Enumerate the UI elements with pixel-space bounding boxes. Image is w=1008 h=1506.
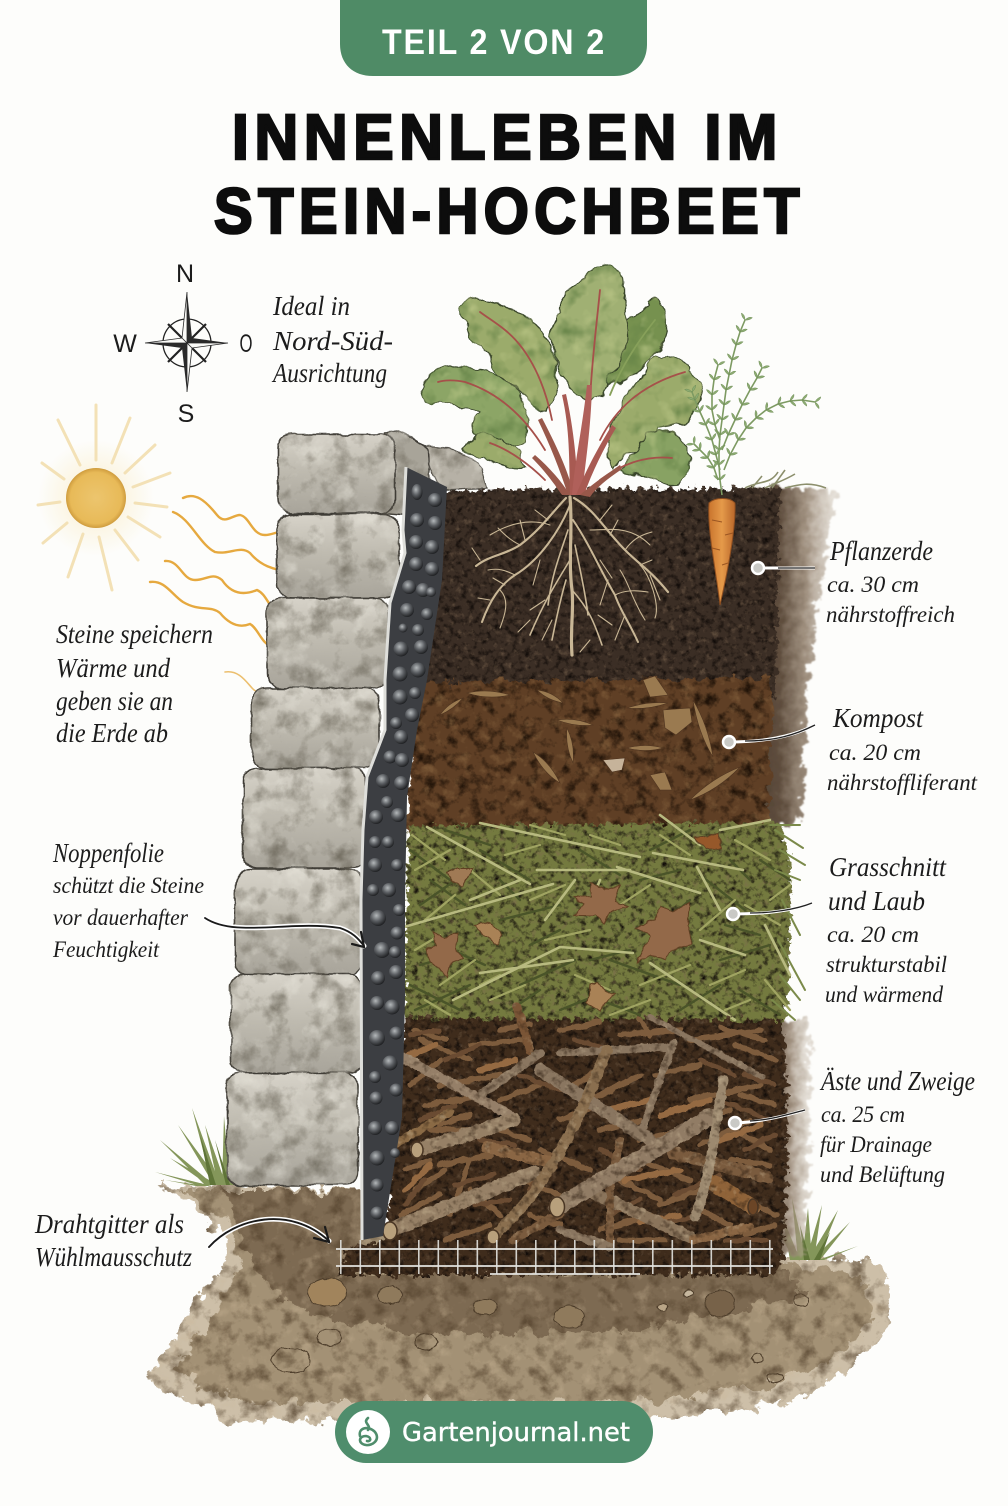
heat waves	[150, 496, 317, 696]
footer pill: brand: Gartenjournal.net	[402, 1418, 630, 1448]
layer: Grasschnitt und Laub	[404, 815, 805, 1028]
thick stems	[532, 385, 622, 497]
layer: Kompost	[405, 676, 772, 835]
title	[214, 101, 805, 247]
plant: roots	[472, 497, 668, 655]
dry leaves on grass	[426, 833, 722, 1011]
branch cut ends	[383, 1142, 758, 1244]
layer: soil wash on right edge	[750, 486, 835, 826]
text: wire mesh note: Wühlmausschutz	[35, 1242, 192, 1272]
plant: carrot	[692, 320, 815, 605]
callout: Grasschnitt: und wärmend	[825, 982, 943, 1007]
dimpled membrane (Noppenfolie)	[361, 467, 447, 1240]
compass: O	[240, 330, 252, 358]
callout: Grasschnitt: und Laub	[828, 886, 925, 916]
callout: Aeste	[729, 1066, 975, 1187]
title: STEIN-HOCHBEET	[214, 175, 805, 247]
large branches	[390, 1007, 767, 1247]
text: stone heat note: Steine speichern	[56, 619, 213, 649]
callout: Aeste: und Belüftung	[820, 1162, 945, 1187]
arrow: to membrane	[205, 918, 364, 947]
callout: Aeste: für Drainage	[820, 1132, 932, 1157]
text: membrane note: vor dauerhafter	[53, 905, 189, 930]
callout: Pflanzerde: ca. 30 cm	[827, 572, 919, 597]
dark grass strands	[410, 830, 790, 1015]
arrow: to wire mesh	[209, 1219, 329, 1247]
callout: Aeste: ca. 25 cm	[821, 1102, 905, 1127]
grass on soil edge	[745, 470, 826, 488]
text: orientation note	[271, 291, 393, 388]
carrot foliage	[692, 320, 815, 495]
callout: Grasschnitt: Grasschnitt	[829, 852, 947, 882]
callouts: layer labels	[723, 536, 978, 1187]
text: wire mesh note: Drahtgitter als	[34, 1209, 184, 1239]
pebbles	[272, 1278, 808, 1383]
branch wash on right edge	[750, 1018, 810, 1255]
text: stone heat note: geben sie an	[56, 686, 173, 716]
callout: Grasschnitt: ca. 20 cm	[827, 922, 919, 947]
grass tufts	[155, 1108, 858, 1260]
callout: Kompost: Kompost	[832, 703, 924, 733]
text: stone heat note	[56, 619, 213, 748]
darker twig fill	[405, 1030, 775, 1240]
text: stone heat note: die Erde ab	[56, 718, 168, 748]
text: membrane note	[52, 838, 204, 962]
text: membrane note: schützt die Steine	[53, 873, 204, 898]
title: INNENLEBEN IM	[232, 101, 783, 173]
wire mesh	[336, 1240, 773, 1274]
callout: Pflanzerde	[752, 536, 955, 627]
callout: Grasschnitt: strukturstabil	[826, 952, 947, 977]
grass blades at edge	[770, 825, 805, 1020]
compass: W	[113, 330, 137, 358]
text: orientation note: Nord-Süd-	[272, 326, 393, 356]
compass: S	[178, 400, 194, 428]
leaves	[422, 264, 701, 484]
compass	[113, 260, 252, 428]
text: membrane note: Noppenfolie	[52, 838, 164, 868]
header pill: part label	[340, 0, 647, 76]
pale grass strands	[404, 815, 790, 1020]
small twigs	[400, 1020, 775, 1240]
text: membrane note: Feuchtigkeit	[52, 937, 160, 962]
layer: Pflanzerde	[420, 488, 780, 700]
icon: sun	[38, 405, 170, 590]
callout: Kompost: nährstoffliferant	[827, 770, 978, 795]
compass: N	[176, 260, 194, 288]
callout: Aeste: Äste und Zweige	[819, 1066, 975, 1096]
layer: Äste und Zweige	[340, 1007, 787, 1275]
text: stone heat note: Wärme und	[56, 653, 170, 683]
text: orientation note: Ideal in	[272, 291, 350, 321]
footer pill: brand	[335, 1401, 653, 1463]
text: orientation note: Ausrichtung	[271, 358, 387, 388]
ground below the bed	[150, 1185, 893, 1425]
header pill: part label: TEIL 2 VON 2	[382, 23, 606, 62]
callout: Pflanzerde: Pflanzerde	[829, 536, 933, 566]
mid grass strands	[412, 825, 790, 1015]
callout: Pflanzerde: nährstoffreich	[826, 602, 955, 627]
stones wall	[227, 432, 487, 1185]
callout: Kompost	[723, 703, 978, 795]
text: wire mesh note	[34, 1209, 192, 1272]
plant: chard	[422, 264, 701, 497]
callout: Grasschnitt	[727, 852, 947, 1007]
callout: Kompost: ca. 20 cm	[829, 740, 921, 765]
compost flakes	[440, 676, 740, 800]
midribs	[438, 290, 685, 480]
